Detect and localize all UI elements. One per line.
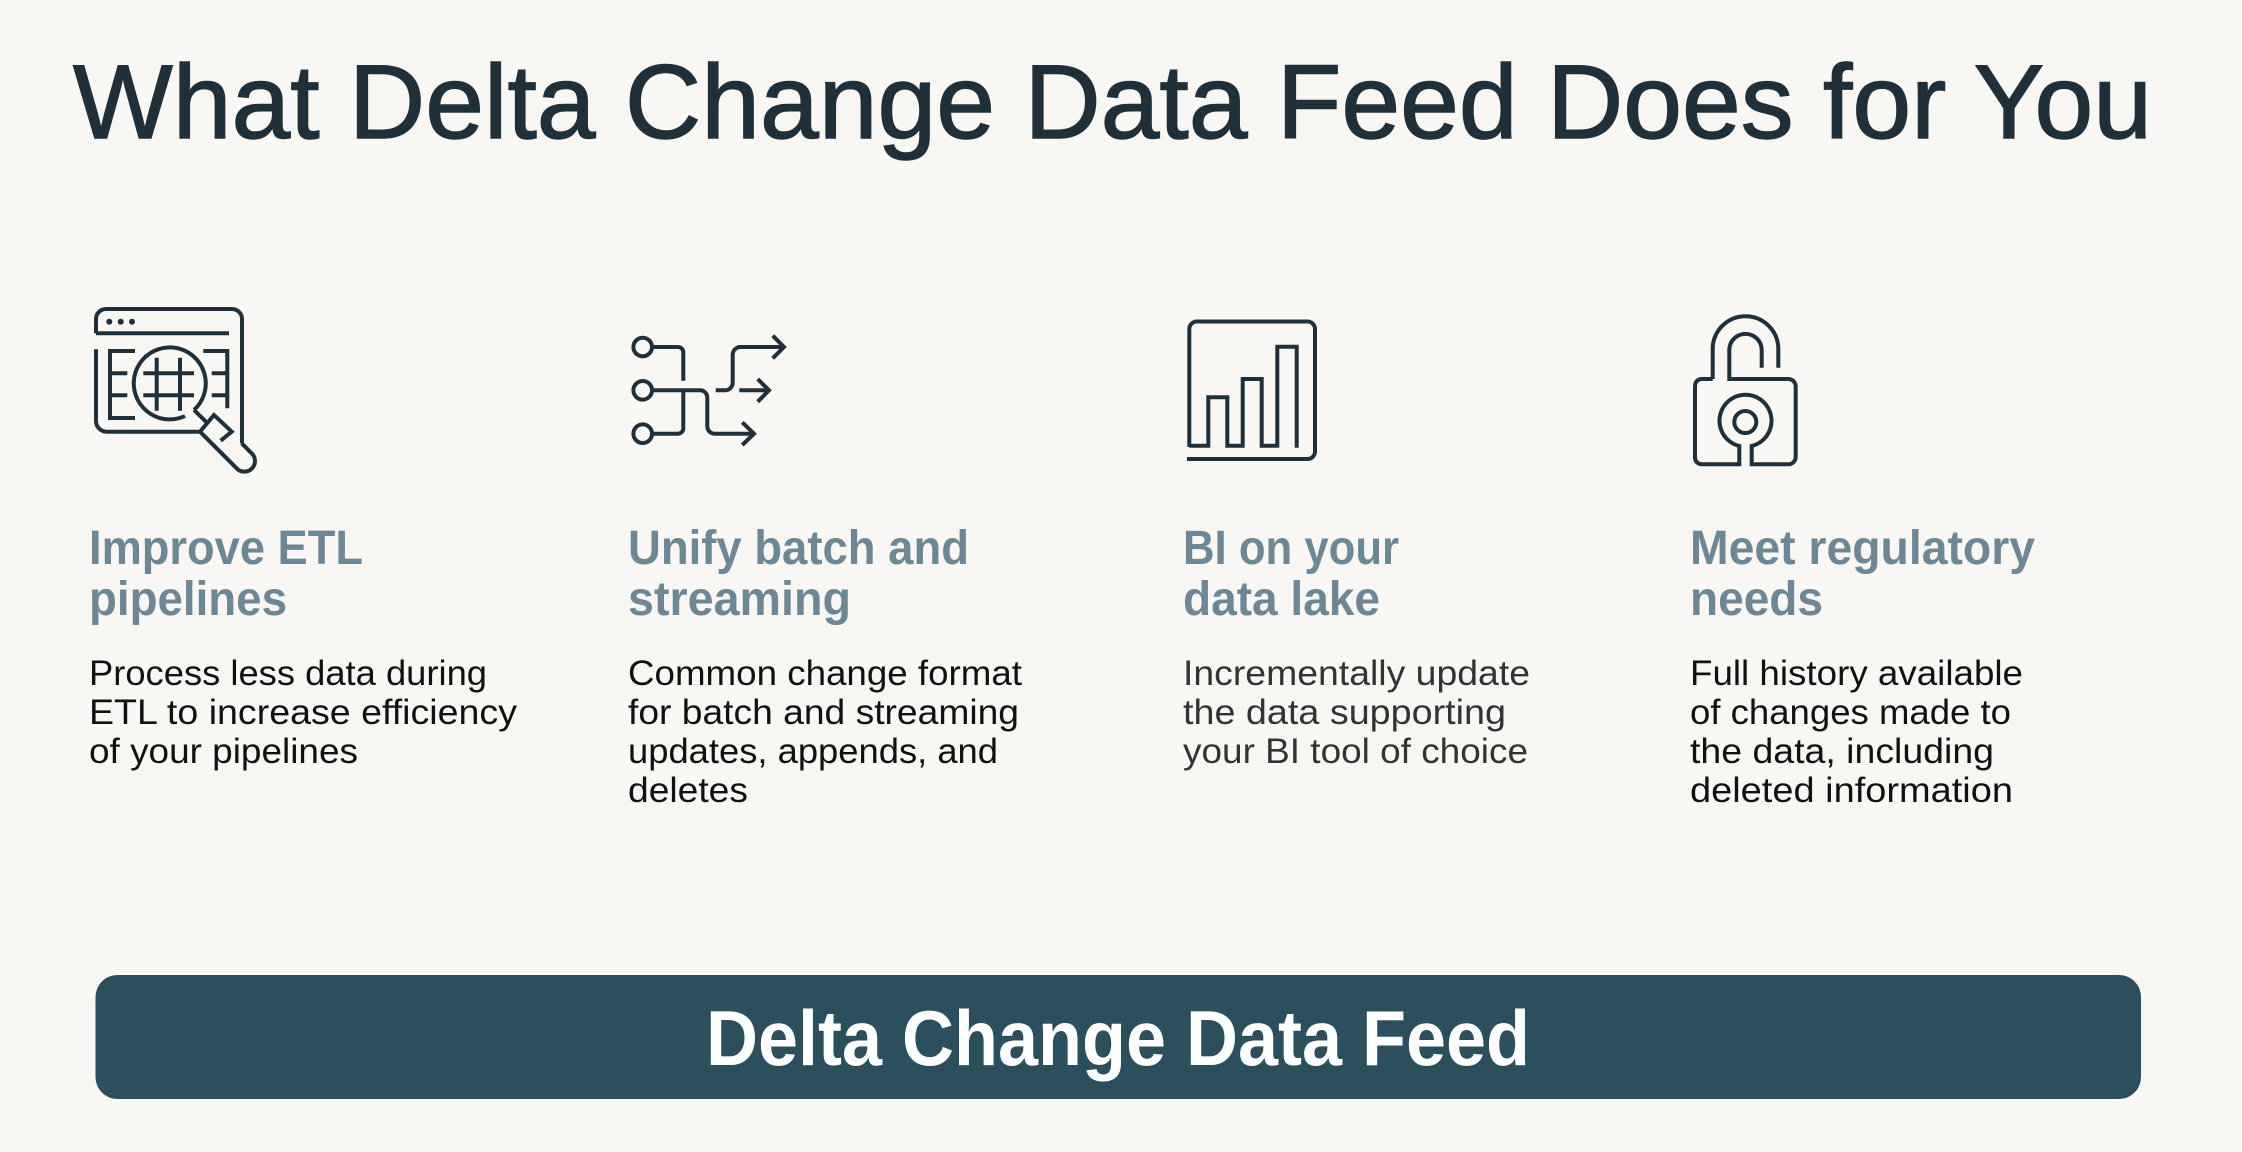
panel: BI on your data lake [1183, 322, 1530, 771]
text block: BI description: Incrementally update [1183, 654, 1530, 693]
text block: improve ETL description: Process less data during [89, 654, 487, 693]
heading: unify batch and streaming: streaming [628, 573, 851, 626]
banner: Delta Change Data Feed: Delta Change Data Feed [706, 994, 1530, 1082]
banner: Delta Change Data Feed [96, 975, 2141, 1099]
heading: improve ETL pipelines [89, 522, 363, 626]
text block: BI description [1183, 654, 1530, 771]
text block: unify description [628, 654, 1022, 810]
heading: meet regulatory needs: needs [1690, 573, 1823, 626]
text block: improve ETL description: of your pipelines [89, 732, 358, 771]
text block: regulatory description [1690, 654, 2023, 810]
panel: unify batch and streaming [628, 336, 1022, 810]
panel: meet regulatory needs [1690, 316, 2035, 810]
heading: unify batch and streaming: Unify batch and [628, 522, 969, 575]
text block: BI description: your BI tool of choice [1183, 732, 1528, 771]
heading: improve ETL pipelines: pipelines [89, 573, 287, 626]
text block: regulatory description: deleted information [1690, 771, 2013, 810]
heading: improve ETL pipelines: Improve ETL [89, 522, 363, 575]
heading: BI on your data lake: BI on your [1183, 522, 1399, 575]
heading: BI on your data lake [1183, 522, 1399, 626]
panel: improve ETL pipelines [89, 309, 518, 771]
title: What Delta Change Data Feed Does for You [73, 44, 2152, 161]
icon: bar chart in frame [1187, 322, 1315, 459]
text block: unify description: for batch and streaming [628, 693, 1019, 732]
text block: regulatory description: of changes made to [1690, 693, 2011, 732]
text block: improve ETL description [89, 654, 518, 771]
icon: merging and splitting arrows [633, 336, 784, 445]
text block: regulatory description: the data, including [1690, 732, 1994, 771]
text block: unify description: updates, appends, and [628, 732, 998, 771]
text block: regulatory description: Full history available [1690, 654, 2023, 693]
heading: meet regulatory needs [1690, 522, 2035, 626]
heading: meet regulatory needs: Meet regulatory [1690, 522, 2035, 575]
heading: unify batch and streaming [628, 522, 969, 626]
text block: unify description: Common change format [628, 654, 1022, 693]
heading: BI on your data lake: data lake [1183, 573, 1380, 626]
icon: padlock with keyhole [1695, 316, 1796, 464]
text block: BI description: the data supporting [1183, 693, 1506, 732]
icon: magnifier over data table [96, 309, 255, 472]
text block: unify description: deletes [628, 771, 748, 810]
text block: improve ETL description: ETL to increase efficiency [89, 693, 518, 732]
